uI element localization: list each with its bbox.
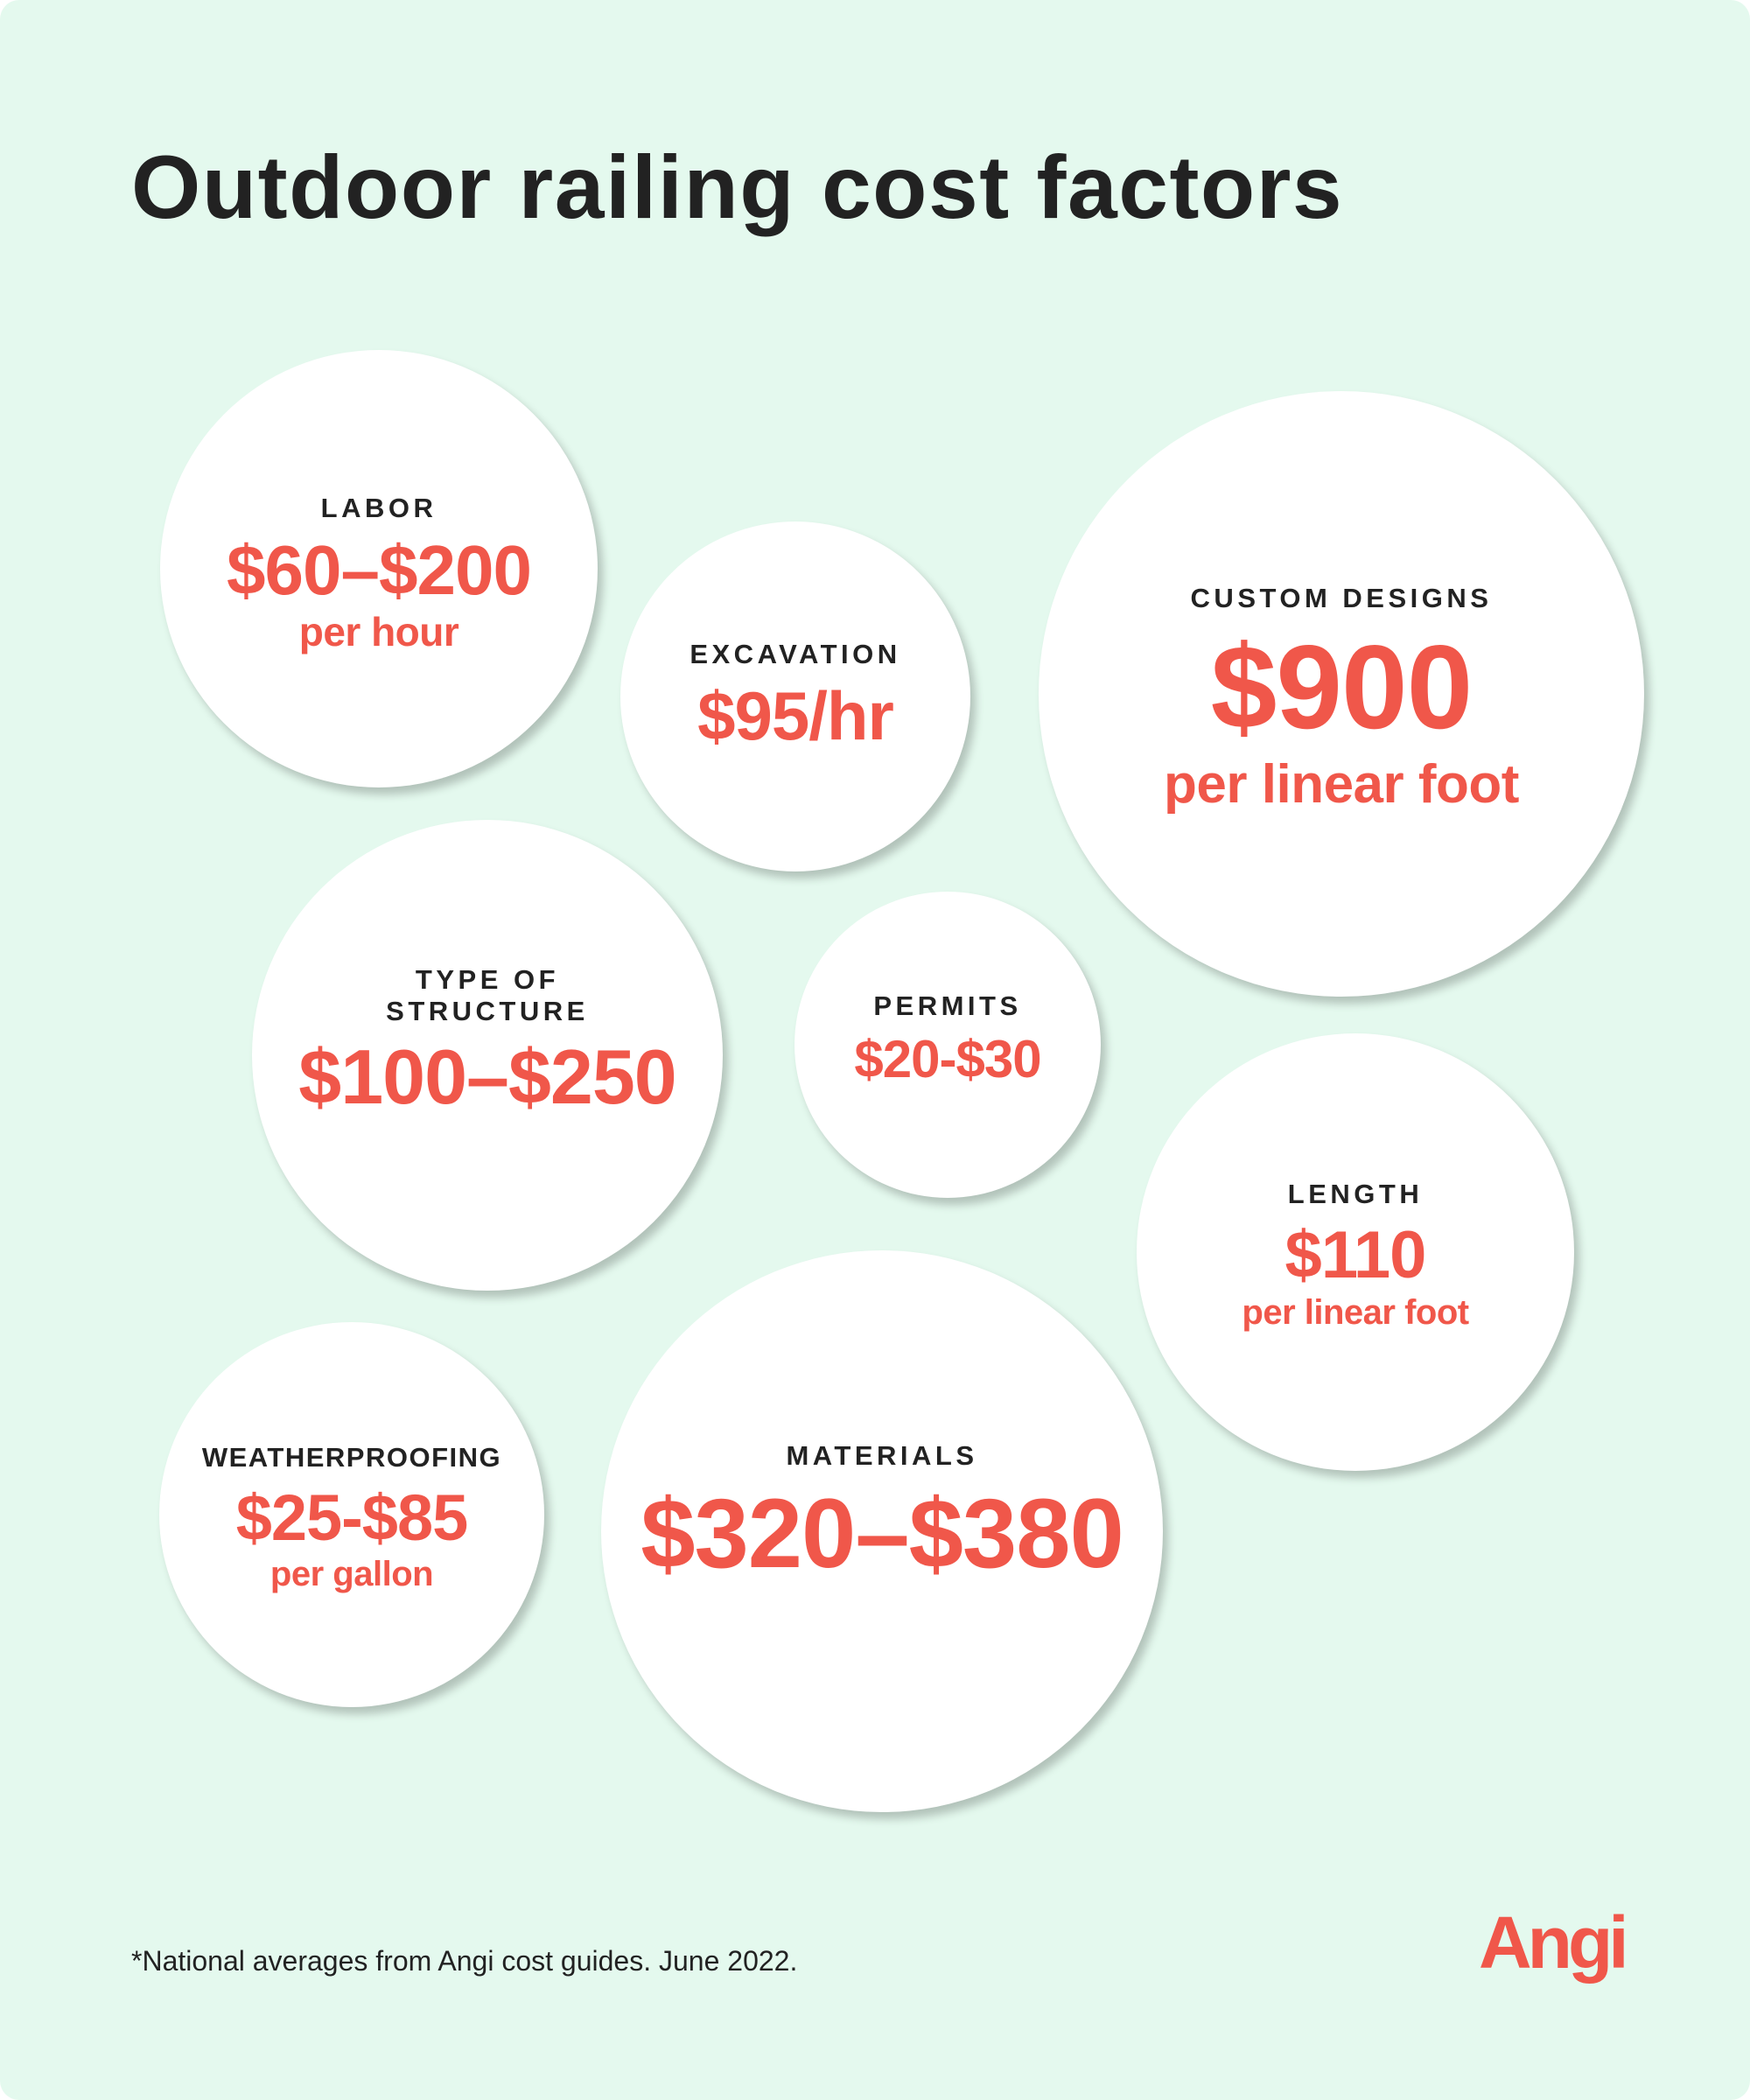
footnote: *National averages from Angi cost guides. June 2022.	[131, 1945, 797, 1977]
circle: type of structure: $100–$250	[298, 1033, 676, 1120]
circle: weatherproofing: $25-$85	[236, 1481, 467, 1554]
circle: length: per linear foot	[1242, 1293, 1469, 1332]
circle: custom designs	[1039, 391, 1644, 997]
circle: weatherproofing: WEATHERPROOFING	[202, 1442, 501, 1473]
circle: permits: PERMITS	[873, 990, 1022, 1021]
circle: excavation: EXCAVATION	[690, 639, 901, 669]
circle: materials: $320–$380	[640, 1479, 1124, 1588]
circle: type of structure: STRUCTURE	[386, 996, 589, 1026]
logo: Angi: Angi	[1479, 1901, 1625, 1984]
circle: labor: $60–$200	[227, 531, 531, 609]
circle: type of structure: TYPE OF	[416, 964, 559, 995]
circle: labor: LABOR	[321, 493, 437, 523]
circle: materials: MATERIALS	[786, 1440, 978, 1471]
circle: permits: $20-$30	[854, 1030, 1041, 1088]
circle: type of structure	[252, 820, 723, 1291]
circle: permits	[794, 892, 1101, 1198]
circle: weatherproofing	[159, 1322, 544, 1707]
circle: length: LENGTH	[1288, 1179, 1423, 1209]
title: Outdoor railing cost factors	[131, 137, 1343, 237]
circle: custom designs: per linear foot	[1164, 754, 1519, 815]
circle: labor: per hour	[299, 609, 458, 654]
circle: excavation	[620, 522, 970, 872]
circle: custom designs: CUSTOM DESIGNS	[1191, 583, 1492, 613]
circle: custom designs: $900	[1211, 620, 1472, 753]
circle: excavation: $95/hr	[697, 677, 893, 754]
circle: labor	[160, 350, 598, 788]
circle: weatherproofing: per gallon	[270, 1555, 433, 1593]
circle: materials	[601, 1250, 1163, 1812]
circle: length: $110	[1285, 1218, 1425, 1292]
circle: length	[1137, 1033, 1574, 1471]
